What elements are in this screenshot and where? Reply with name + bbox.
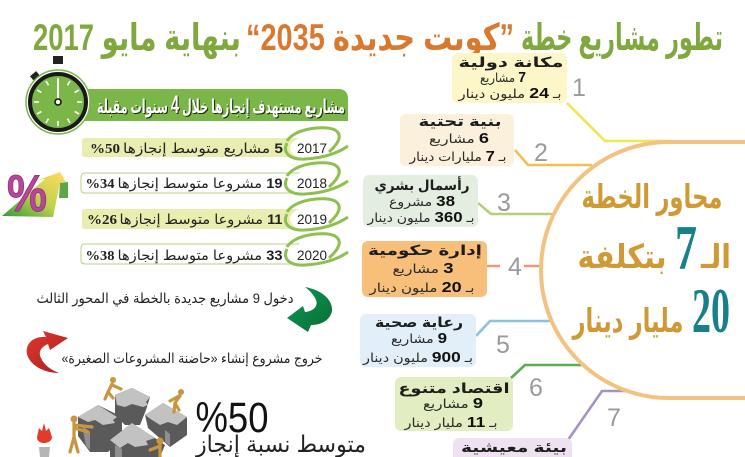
row 2019: 11 مشروعا متوسط إنجازها: [120, 211, 283, 228]
row 2020: 2020: [297, 248, 327, 263]
axis 5: [360, 314, 476, 367]
axis 1 number: 1: [572, 74, 586, 102]
axis 5: 9 مشاريع: [391, 330, 447, 347]
axis 2: بـ 7 مليارات دينار: [408, 148, 507, 165]
axis 7: بيئة معيشية: [461, 439, 567, 455]
icon: red arrow: [27, 331, 68, 373]
axis 4 number: 4: [508, 253, 522, 281]
central plan arc: [541, 142, 745, 398]
row 2019: 2019: [297, 212, 327, 227]
axis 3: رأسمال بشري: [374, 176, 470, 195]
axis 3: بـ 360 مليون دينار: [366, 209, 474, 226]
icon: percent arrow: %: [7, 165, 47, 223]
row 2018: 19 مشروعا متوسط إنجازها: [118, 175, 283, 192]
axis 3: 38 مشروع: [389, 193, 455, 210]
axis 6: 9 مشاريع: [423, 395, 483, 412]
axis 2 number: 2: [534, 139, 548, 167]
icon: flame logo: [37, 423, 52, 457]
axis 2: [400, 113, 514, 166]
icon: puzzle with figures: [70, 377, 187, 457]
icon: green arrow: [287, 287, 332, 332]
note: new projects: دخول 9 مشاريع جديدة بالخطة في المحور الثالث: [36, 290, 294, 307]
axis 4: بـ 20 مليون دينار: [368, 279, 474, 296]
axis 4: إدارة حكومية: [368, 242, 482, 259]
axis 7: [453, 438, 572, 457]
axis 2: 6 مشاريع: [429, 130, 489, 147]
axis 1: مكانة دولية: [458, 54, 564, 71]
row 2020: [81, 234, 348, 267]
axis 4: [362, 241, 487, 297]
axis 5 number: 5: [496, 331, 510, 359]
row 2020: 33 مشروعا متوسط إنجازها: [118, 247, 283, 264]
row 2020: %38: [86, 249, 114, 264]
axis 4: 3 مشاريع: [392, 260, 454, 277]
title: بنهاية مايو 2017: [33, 17, 241, 59]
axis 1: 7 مشاريع: [480, 69, 526, 86]
axis 6: [395, 377, 513, 431]
row 2019: %26: [87, 213, 117, 228]
axis 3 number: 3: [497, 189, 511, 217]
row 2017: [82, 128, 348, 161]
axis 2: بنية تحتية: [418, 113, 502, 129]
row 2017: 5 مشاريع متوسط إنجازها: [123, 140, 283, 157]
banner: مشاريع مستهدف إنجازها خلال 4 سنوات مقبلة: [97, 91, 345, 119]
row 2017: 2017: [297, 141, 327, 156]
stat: 50 percent: %50: [196, 394, 268, 442]
icon: stopwatch: [26, 56, 90, 134]
axis 7 number: 7: [607, 404, 621, 432]
central plan text: مليار دينار: [571, 302, 684, 340]
banner: [80, 89, 348, 121]
axis 6 number: 6: [529, 374, 543, 402]
central plan text: 7: [675, 212, 697, 283]
stat caption: متوسط نسبة إنجاز: [195, 431, 366, 457]
axis 5: رعاية صحية: [375, 314, 463, 330]
row 2019: [82, 199, 348, 232]
row 2018: 2018: [297, 176, 327, 191]
row 2018: [81, 163, 348, 196]
axis 6: بـ 11 مليار دينار: [403, 414, 498, 431]
central plan text: [571, 178, 731, 346]
title: ”كويت جديدة 2035“: [246, 17, 514, 59]
axis 3: [363, 175, 478, 227]
axis 1: بـ 24 مليون دينار: [457, 85, 562, 102]
axis 6: اقتصاد متنوع: [398, 380, 510, 397]
connector lines: [476, 103, 672, 440]
row 2018: %34: [86, 177, 114, 192]
axis 5: بـ 900 مليون دينار: [362, 349, 473, 366]
central plan text: الـ: [700, 238, 731, 275]
row 2017: %50: [90, 142, 120, 157]
central plan text: بتكلفة: [578, 238, 666, 275]
note: removed project: خروج مشروع إنشاء «حاضنة المشروعات الصغيرة»: [62, 350, 322, 367]
axis 1: [452, 53, 567, 103]
title: [33, 17, 723, 59]
